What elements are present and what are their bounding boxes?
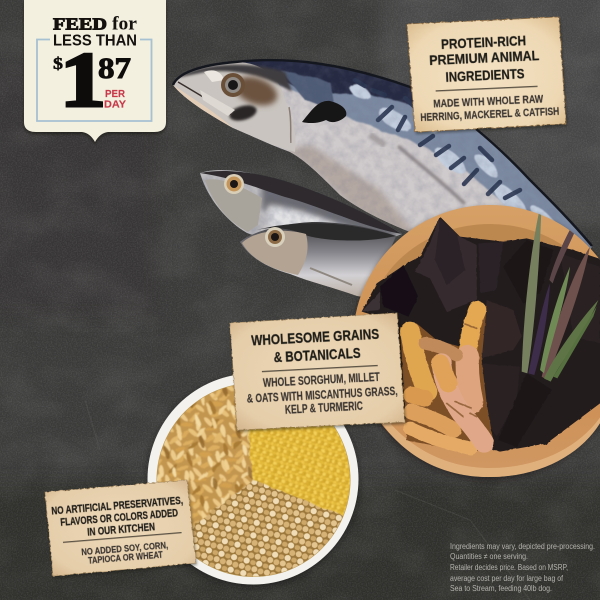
price: $ bbox=[53, 54, 64, 73]
price: 1 bbox=[60, 36, 106, 123]
mackerel back bbox=[278, 82, 592, 249]
disclaimer: Quantities ≠ one serving. bbox=[450, 552, 528, 561]
label text: WHOLESOME GRAINS bbox=[251, 326, 380, 349]
turmeric bbox=[400, 303, 494, 452]
disclaimer: average cost per day for large bag of bbox=[450, 574, 564, 583]
label text: INGREDIENTS bbox=[445, 65, 525, 85]
label text bbox=[243, 325, 399, 419]
label text: PREMIUM ANIMAL bbox=[429, 47, 540, 68]
kelp bbox=[362, 217, 600, 452]
heading: for: for bbox=[112, 14, 138, 34]
wooden bowl with kelp, turmeric and grass bbox=[353, 200, 600, 480]
disclaimer: Retailer decides price. Based on MSRP, bbox=[450, 563, 568, 572]
white bowl of grains bbox=[140, 370, 370, 587]
label: protein-rich bbox=[407, 17, 567, 134]
large mackerel bbox=[172, 58, 593, 249]
label text: NO ARTIFICIAL PRESERVATIVES, bbox=[51, 495, 183, 518]
sorghum bbox=[192, 432, 343, 576]
eye: lower sardine bbox=[265, 227, 285, 247]
label: wholesome grains bbox=[230, 313, 406, 432]
label text bbox=[51, 495, 188, 569]
label text: FLAVORS OR COLORS ADDED bbox=[60, 507, 179, 529]
label text: TAPIOCA OR WHEAT bbox=[88, 550, 163, 567]
price bbox=[53, 36, 131, 123]
label text: KELP & TURMERIC bbox=[285, 401, 363, 417]
label text: HERRING, MACKEREL & CATFISH bbox=[420, 106, 560, 124]
heading: FEED bbox=[53, 14, 107, 34]
label text: MADE WITH WHOLE RAW bbox=[433, 93, 544, 110]
label text: & OATS WITH MISCANTHUS GRASS, bbox=[247, 386, 398, 406]
belly shading bbox=[286, 144, 413, 232]
millet bbox=[248, 425, 350, 516]
price: 87 bbox=[98, 52, 131, 85]
disclaimer: Sea to Stream, feeding 40lb dog. bbox=[450, 584, 552, 593]
label text: & BOTANICALS bbox=[273, 345, 361, 366]
per day: PER bbox=[105, 88, 125, 100]
per day: DAY bbox=[104, 98, 126, 110]
label text: PROTEIN-RICH bbox=[441, 32, 526, 52]
label text: IN OUR KITCHEN bbox=[87, 521, 156, 539]
label text: NO ADDED SOY, CORN, bbox=[81, 540, 169, 558]
label text bbox=[417, 31, 560, 124]
small fish: lower sardine bbox=[240, 222, 396, 298]
heading: less than: LESS THAN bbox=[53, 32, 137, 50]
label text: WHOLE SORGHUM, MILLET bbox=[263, 372, 380, 390]
disclaimer bbox=[450, 542, 595, 593]
mackerel eye bbox=[221, 73, 245, 97]
grass blades bbox=[522, 200, 598, 382]
mackerel head bbox=[173, 62, 295, 152]
oats bbox=[157, 386, 254, 528]
feed price badge bbox=[24, 0, 166, 144]
eye: upper sardine bbox=[224, 174, 244, 194]
mackerel pectoral fin bbox=[302, 101, 346, 123]
blue frame bbox=[37, 40, 152, 121]
per day bbox=[104, 88, 126, 110]
label: no artificial preservatives bbox=[45, 480, 197, 578]
small fish: upper sardine bbox=[200, 170, 402, 236]
